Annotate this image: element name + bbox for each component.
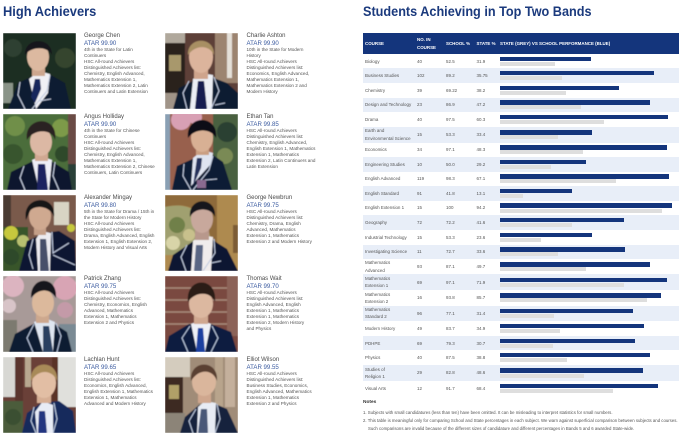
text: Mathematics Extension 1, bbox=[84, 77, 137, 82]
row: Mathematics Extension 2: Extension 2 bbox=[365, 299, 388, 304]
text: ATAR 99.75 bbox=[84, 283, 116, 290]
row: Physics: 40 bbox=[417, 355, 422, 360]
row: Biology: 52.5 bbox=[446, 59, 455, 64]
row: Design and Technology: 23 bbox=[417, 102, 422, 107]
note 2: Such comparisons are invalid because of the different sizes of candidature and different percentages in Bands 5 and 6 awarded State-wide. bbox=[368, 426, 634, 431]
row: Business Studies: 102 bbox=[417, 73, 424, 78]
text: Distinguished Achievers list: bbox=[84, 65, 141, 70]
text: Distinguished Achievers list: bbox=[84, 296, 141, 301]
row: Engineering Studies: 10 bbox=[417, 162, 422, 167]
table header bbox=[363, 33, 679, 54]
text: Continuers bbox=[84, 134, 106, 139]
row: Economics bbox=[365, 145, 667, 154]
photo: Angus Holliday bbox=[3, 114, 76, 190]
text: HSC All-round Achievers bbox=[246, 290, 297, 295]
text: Drama, English Advanced, English bbox=[84, 233, 154, 238]
text: HSC All-round Achievers bbox=[84, 221, 134, 226]
row: Design and Technology: Design and Technology bbox=[365, 102, 411, 107]
row: Earth and Environmental Science: Environmental Science bbox=[365, 136, 411, 141]
text: ATAR 99.90 bbox=[84, 121, 116, 128]
student text: Alexander Mingay bbox=[84, 194, 154, 250]
row: English Standard: 13.1 bbox=[476, 191, 485, 196]
text: English Advanced, English bbox=[246, 302, 301, 307]
row: Mathematics Extension 2: 93.8 bbox=[446, 295, 455, 300]
text: HSC All-round Achievers bbox=[84, 290, 134, 295]
row: Industrial Technology: 15 bbox=[417, 235, 422, 240]
row: Industrial Technology: 23.6 bbox=[476, 235, 485, 240]
row: Chemistry: 69.22 bbox=[446, 88, 457, 93]
text: ATAR 99.90 bbox=[246, 40, 279, 47]
row: Economics: 34 bbox=[417, 147, 422, 152]
row: Drama: 60.3 bbox=[476, 117, 485, 122]
text: Extension 1, Mathematics bbox=[246, 395, 299, 400]
row: PDHPE: 69 bbox=[417, 341, 422, 346]
note 2: 2. This table is meaningful only for comparing School and State percentages in each subject. We warn against superficial comparison between subjects and courses. bbox=[363, 418, 678, 423]
text: Modern History bbox=[246, 89, 278, 94]
text: Distinguished Achievers list: bbox=[84, 377, 141, 382]
text: Ethan Tan bbox=[246, 114, 273, 120]
row: Engineering Studies: 29.2 bbox=[476, 162, 485, 167]
row: Earth and Environmental Science bbox=[363, 127, 679, 143]
row: Mathematics Extension 2: Mathematics bbox=[365, 292, 390, 297]
table: students achieving in top two bands bbox=[363, 33, 679, 393]
row: Drama: 97.5 bbox=[446, 117, 455, 122]
text: Extension 2 and Modern History bbox=[246, 239, 312, 244]
text: Chemistry, Drama, English bbox=[246, 221, 301, 226]
student text: George Newbrun bbox=[246, 194, 312, 244]
row: English Advanced: 119 bbox=[417, 176, 424, 181]
row: Biology: 31.9 bbox=[476, 59, 485, 64]
text: Mathematics Extension 2, Chinese bbox=[84, 164, 155, 169]
row: Economics: 48.3 bbox=[476, 147, 485, 152]
row: Mathematics Standard 2: 31.4 bbox=[476, 311, 485, 316]
photo: Charlie Ashton bbox=[165, 33, 238, 109]
text: Economics, English Advanced, bbox=[84, 383, 147, 388]
row: Business Studies: 89.2 bbox=[446, 73, 455, 78]
row: English Extension 1: 94.2 bbox=[476, 205, 485, 210]
text: ATAR 99.70 bbox=[246, 283, 279, 290]
text: Extension 2 and Physics bbox=[246, 401, 297, 406]
text: Chemistry, English Advanced, bbox=[84, 152, 145, 157]
row: Drama: Drama bbox=[365, 117, 378, 122]
text: Distinguished Achievers list: bbox=[246, 377, 303, 382]
student text: Elliot Wilson bbox=[246, 356, 312, 406]
text: ATAR 99.55 bbox=[246, 364, 279, 371]
text: Extension 1, Mathematics bbox=[246, 308, 299, 313]
row: Investigating Science: 33.6 bbox=[476, 249, 485, 254]
row: Engineering Studies: 50.0 bbox=[446, 162, 455, 167]
row: PDHPE: PDHPE bbox=[365, 341, 380, 346]
note 1: 1. Subjects with small candidatures (less than ten) have been omitted. It can be misleading to interpret statistics for small numbers. bbox=[363, 410, 613, 414]
row: Mathematics Extension 2: 85.7 bbox=[476, 295, 485, 300]
row: Physics: Physics bbox=[365, 355, 380, 360]
text: Extension 1, Mathematics bbox=[246, 233, 299, 238]
photo: George Newbrun bbox=[165, 195, 238, 271]
text: HSC All-round Achievers bbox=[246, 371, 297, 376]
row: Chemistry: 39 bbox=[417, 88, 422, 93]
text: ATAR 99.85 bbox=[246, 121, 279, 128]
row: English Extension 1: 15 bbox=[417, 205, 422, 210]
text: Thomas Wait bbox=[246, 276, 282, 282]
text: George Newbrun bbox=[246, 194, 292, 200]
notes bbox=[363, 400, 678, 431]
student text: Patrick Zhang bbox=[84, 276, 147, 325]
text: the State for Modern History bbox=[84, 215, 141, 220]
table header: STATE % bbox=[476, 41, 496, 46]
row: Studies of Religion 1: Studies of bbox=[365, 367, 385, 372]
row: Geography: 72.2 bbox=[446, 220, 455, 225]
text: 10th in the State for Modern bbox=[246, 47, 303, 52]
text: HSC All-round Achievers bbox=[246, 209, 297, 214]
text: Lachlan Hunt bbox=[84, 356, 119, 362]
text: Charlie Ashton bbox=[246, 32, 286, 38]
text: Mathematics Extension 1, bbox=[84, 158, 137, 163]
text: HSC All-round Achievers bbox=[84, 140, 134, 145]
row: English Extension 1 bbox=[365, 203, 672, 213]
row: Drama: 40 bbox=[417, 117, 422, 122]
text: Latin Extension bbox=[246, 164, 278, 169]
row: Studies of Religion 1: 48.6 bbox=[476, 370, 485, 375]
row: Engineering Studies: Engineering Studies bbox=[365, 162, 405, 167]
text: HSC All-round Achievers bbox=[84, 371, 134, 376]
row: English Advanced: 67.1 bbox=[476, 176, 485, 181]
row: Mathematics Advanced: Advanced bbox=[365, 268, 385, 273]
row: Physics bbox=[365, 353, 650, 362]
text: Distinguished Achievers list: bbox=[246, 65, 303, 70]
text: Advanced and Modern History bbox=[84, 401, 146, 406]
text: Extension 1, Mathematics bbox=[84, 395, 137, 400]
text: Business Studies, Economics, bbox=[246, 383, 308, 388]
row: PDHPE: 79.3 bbox=[446, 341, 455, 346]
text: Mathematics Extension 1, bbox=[246, 77, 299, 82]
row: Economics: Economics bbox=[365, 147, 387, 152]
row: Chemistry: 38.2 bbox=[476, 88, 485, 93]
text: 4th in the State for Latin bbox=[84, 47, 133, 52]
row: Biology bbox=[365, 57, 591, 66]
row: Drama bbox=[365, 115, 668, 124]
row: Visual Arts: 91.7 bbox=[446, 386, 455, 391]
text: English Extension 1, Mathematics bbox=[84, 389, 153, 394]
row: Physics: 38.8 bbox=[476, 355, 485, 360]
row: English Standard: 91 bbox=[417, 191, 422, 196]
notes heading: Notes bbox=[363, 400, 376, 405]
row: Geography: Geography bbox=[365, 220, 387, 225]
row: Modern History: Modern History bbox=[365, 326, 395, 331]
row: Chemistry bbox=[365, 86, 619, 95]
text: Alexander Mingay bbox=[84, 194, 132, 200]
row: English Advanced: English Advanced bbox=[365, 176, 400, 181]
text: Extension 1, English Extension 2, bbox=[84, 239, 152, 244]
text: Distinguished Achievers list: bbox=[246, 134, 303, 139]
row: Mathematics Standard 2: Mathematics bbox=[365, 307, 390, 312]
row: Business Studies: 35.75 bbox=[476, 73, 488, 78]
row: Visual Arts bbox=[365, 384, 658, 393]
text: Chemistry, Economics, English bbox=[84, 302, 147, 307]
row: Geography: 41.6 bbox=[476, 220, 485, 225]
row: Modern History: 34.9 bbox=[476, 326, 485, 331]
text: HSC All-round Achievers bbox=[246, 128, 297, 133]
text: Continuers bbox=[84, 53, 106, 58]
student text: Charlie Ashton bbox=[246, 32, 309, 94]
text: Extension 2, Latin Continuers and bbox=[246, 158, 315, 163]
row: Studies of Religion 1: 82.8 bbox=[446, 370, 455, 375]
photo: Alexander Mingay bbox=[3, 195, 76, 271]
row: English Extension 1: English Extension 1 bbox=[365, 205, 404, 210]
text: Distinguished Achievers list: bbox=[84, 227, 141, 232]
row: Geography: 72 bbox=[417, 220, 422, 225]
row: Mathematics Advanced: 93 bbox=[417, 264, 422, 269]
row: Industrial Technology bbox=[365, 233, 592, 242]
row: Visual Arts: Visual Arts bbox=[365, 386, 386, 391]
text: History bbox=[246, 53, 261, 58]
row: English Standard bbox=[363, 186, 679, 201]
row: Visual Arts: 12 bbox=[417, 386, 422, 391]
text: Economics, English Advanced, bbox=[246, 71, 309, 76]
row: Physics: 87.5 bbox=[446, 355, 455, 360]
photo: George Chen bbox=[3, 33, 76, 109]
row: Mathematics Extension 1: 71.9 bbox=[476, 280, 485, 285]
text: Modern History and Visual Arts bbox=[84, 245, 147, 250]
row: English Extension 1: 100 bbox=[446, 205, 453, 210]
row: Investigating Science: Investigating Science bbox=[365, 249, 407, 254]
row: Mathematics Extension 2: 16 bbox=[417, 295, 422, 300]
text: Mathematics Extension 2 and bbox=[246, 83, 307, 88]
row: PDHPE: 30.7 bbox=[476, 341, 485, 346]
row: Mathematics Extension 1: 69 bbox=[417, 280, 422, 285]
row: PDHPE bbox=[363, 336, 679, 350]
text: George Chen bbox=[84, 32, 120, 38]
row: Modern History: 49 bbox=[417, 326, 422, 331]
text: ATAR 99.65 bbox=[84, 364, 116, 371]
text: Mathematics Extension 2, Latin bbox=[84, 83, 148, 88]
row: Investigating Science: 11 bbox=[417, 249, 422, 254]
text: Extension 2 and Physics bbox=[84, 320, 134, 325]
row: Investigating Science: 72.7 bbox=[446, 249, 455, 254]
text: and Physics bbox=[246, 326, 271, 331]
text: 5th in the State for Drama / 15th in bbox=[84, 209, 154, 214]
student text: Thomas Wait bbox=[246, 276, 304, 331]
table header: COURSE bbox=[417, 44, 436, 50]
row: Industrial Technology: Industrial Technology bbox=[365, 235, 407, 240]
row: Modern History: 83.7 bbox=[446, 326, 455, 331]
text: Chemistry, English Advanced, bbox=[84, 71, 145, 76]
text: HSC All-round Achievers bbox=[246, 59, 297, 64]
row: Business Studies: Business Studies bbox=[365, 73, 399, 78]
row: Design and Technology: 47.2 bbox=[476, 102, 485, 107]
photo: Patrick Zhang bbox=[3, 276, 76, 352]
row: English Advanced: 98.3 bbox=[446, 176, 455, 181]
text: English Extension 1, Mathematics bbox=[246, 146, 315, 151]
student text: George Chen bbox=[84, 32, 148, 94]
heading: High Achievers: High Achievers bbox=[3, 3, 96, 19]
text: Angus Holliday bbox=[84, 114, 124, 120]
text: Chemistry, English Advanced, bbox=[246, 140, 307, 145]
row: Engineering Studies bbox=[363, 157, 679, 172]
text: ATAR 99.75 bbox=[246, 202, 279, 209]
text: English Advanced, Mathematics bbox=[246, 389, 312, 394]
text: Distinguished Achievers list: bbox=[246, 296, 303, 301]
row: Mathematics Extension 1: Extension 1 bbox=[365, 283, 388, 288]
student text: Ethan Tan bbox=[246, 114, 316, 169]
student text: Angus Holliday bbox=[84, 114, 155, 175]
row: Geography bbox=[363, 215, 679, 230]
photo: Elliot Wilson bbox=[165, 357, 238, 433]
row: Mathematics Advanced: 87.1 bbox=[446, 264, 455, 269]
heading: Students Achieving in Top Two Bands: Students Achieving in Top Two Bands bbox=[363, 3, 592, 19]
row: Mathematics Standard 2: Standard 2 bbox=[365, 314, 387, 319]
row: Investigating Science bbox=[363, 245, 679, 259]
photo: Lachlan Hunt bbox=[3, 357, 76, 433]
row: Mathematics Extension 1: Mathematics bbox=[365, 276, 390, 281]
row: Visual Arts: 68.4 bbox=[476, 386, 485, 391]
note 2 bbox=[363, 418, 678, 431]
text: HSC All-round Achievers bbox=[84, 59, 134, 64]
row: Economics: 97.1 bbox=[446, 147, 455, 152]
row: Modern History bbox=[365, 324, 644, 333]
row: Mathematics Extension 1 bbox=[363, 274, 679, 290]
text: Distinguished Achievers list: bbox=[246, 215, 303, 220]
row: Mathematics Advanced: 49.7 bbox=[476, 264, 485, 269]
row: Earth and Environmental Science: 15 bbox=[417, 132, 422, 137]
row: Studies of Religion 1 bbox=[363, 365, 679, 381]
text: Extension 2, Modern History bbox=[246, 320, 304, 325]
table header: COURSE bbox=[365, 41, 384, 46]
text: Advanced, Mathematics bbox=[84, 308, 133, 313]
row: English Standard: English Standard bbox=[365, 191, 399, 196]
text: Patrick Zhang bbox=[84, 276, 121, 282]
row: Biology: 40 bbox=[417, 59, 422, 64]
table header: NO. IN bbox=[417, 37, 431, 42]
table header: STATE (GREY) VS SCHOOL PERFORMANCE (BLUE) bbox=[500, 41, 610, 46]
row: English Advanced bbox=[365, 174, 669, 183]
row: Mathematics Standard 2: 96 bbox=[417, 311, 422, 316]
row: Industrial Technology: 53.3 bbox=[446, 235, 455, 240]
row: Earth and Environmental Science: 53.3 bbox=[446, 132, 455, 137]
text: Extension 1, Mathematics bbox=[246, 152, 299, 157]
row: Design and Technology bbox=[363, 98, 679, 112]
row: Chemistry: Chemistry bbox=[365, 88, 385, 93]
row: Design and Technology: 86.9 bbox=[446, 102, 455, 107]
row: Studies of Religion 1: 29 bbox=[417, 370, 422, 375]
row: Biology: Biology bbox=[365, 59, 380, 64]
text: Elliot Wilson bbox=[246, 356, 279, 362]
text: Continuers and Latin Extension bbox=[84, 89, 148, 94]
student text: Lachlan Hunt bbox=[84, 356, 153, 406]
text: Advanced, Mathematics bbox=[246, 227, 296, 232]
row: Earth and Environmental Science: Earth and bbox=[365, 128, 384, 133]
row: Studies of Religion 1: Religion 1 bbox=[365, 374, 385, 379]
row: English Standard: 41.8 bbox=[446, 191, 455, 196]
text: ATAR 99.80 bbox=[84, 202, 116, 209]
row: Mathematics Standard 2: 77.1 bbox=[446, 311, 455, 316]
text: Extension 1, Mathematics bbox=[246, 314, 299, 319]
row: Earth and Environmental Science: 33.4 bbox=[476, 132, 485, 137]
text: ATAR 99.90 bbox=[84, 40, 116, 47]
row: Business Studies bbox=[363, 68, 679, 83]
row: Mathematics Standard 2 bbox=[363, 306, 679, 321]
text: 4th in the State for Chinese bbox=[84, 128, 140, 133]
table header: SCHOOL % bbox=[446, 41, 470, 46]
text: Continuers, Latin Continuers bbox=[84, 170, 142, 175]
row: Mathematics Extension 1: 97.1 bbox=[446, 280, 455, 285]
row: Mathematics Extension 2 bbox=[365, 292, 661, 304]
text: Extension 1, Mathematics bbox=[84, 314, 137, 319]
photo: Ethan Tan bbox=[165, 114, 238, 190]
row: Mathematics Advanced bbox=[365, 260, 650, 273]
photo: Thomas Wait bbox=[165, 276, 238, 352]
text: Distinguished Achievers list: bbox=[84, 146, 141, 151]
row: Mathematics Advanced: Mathematics bbox=[365, 260, 390, 265]
